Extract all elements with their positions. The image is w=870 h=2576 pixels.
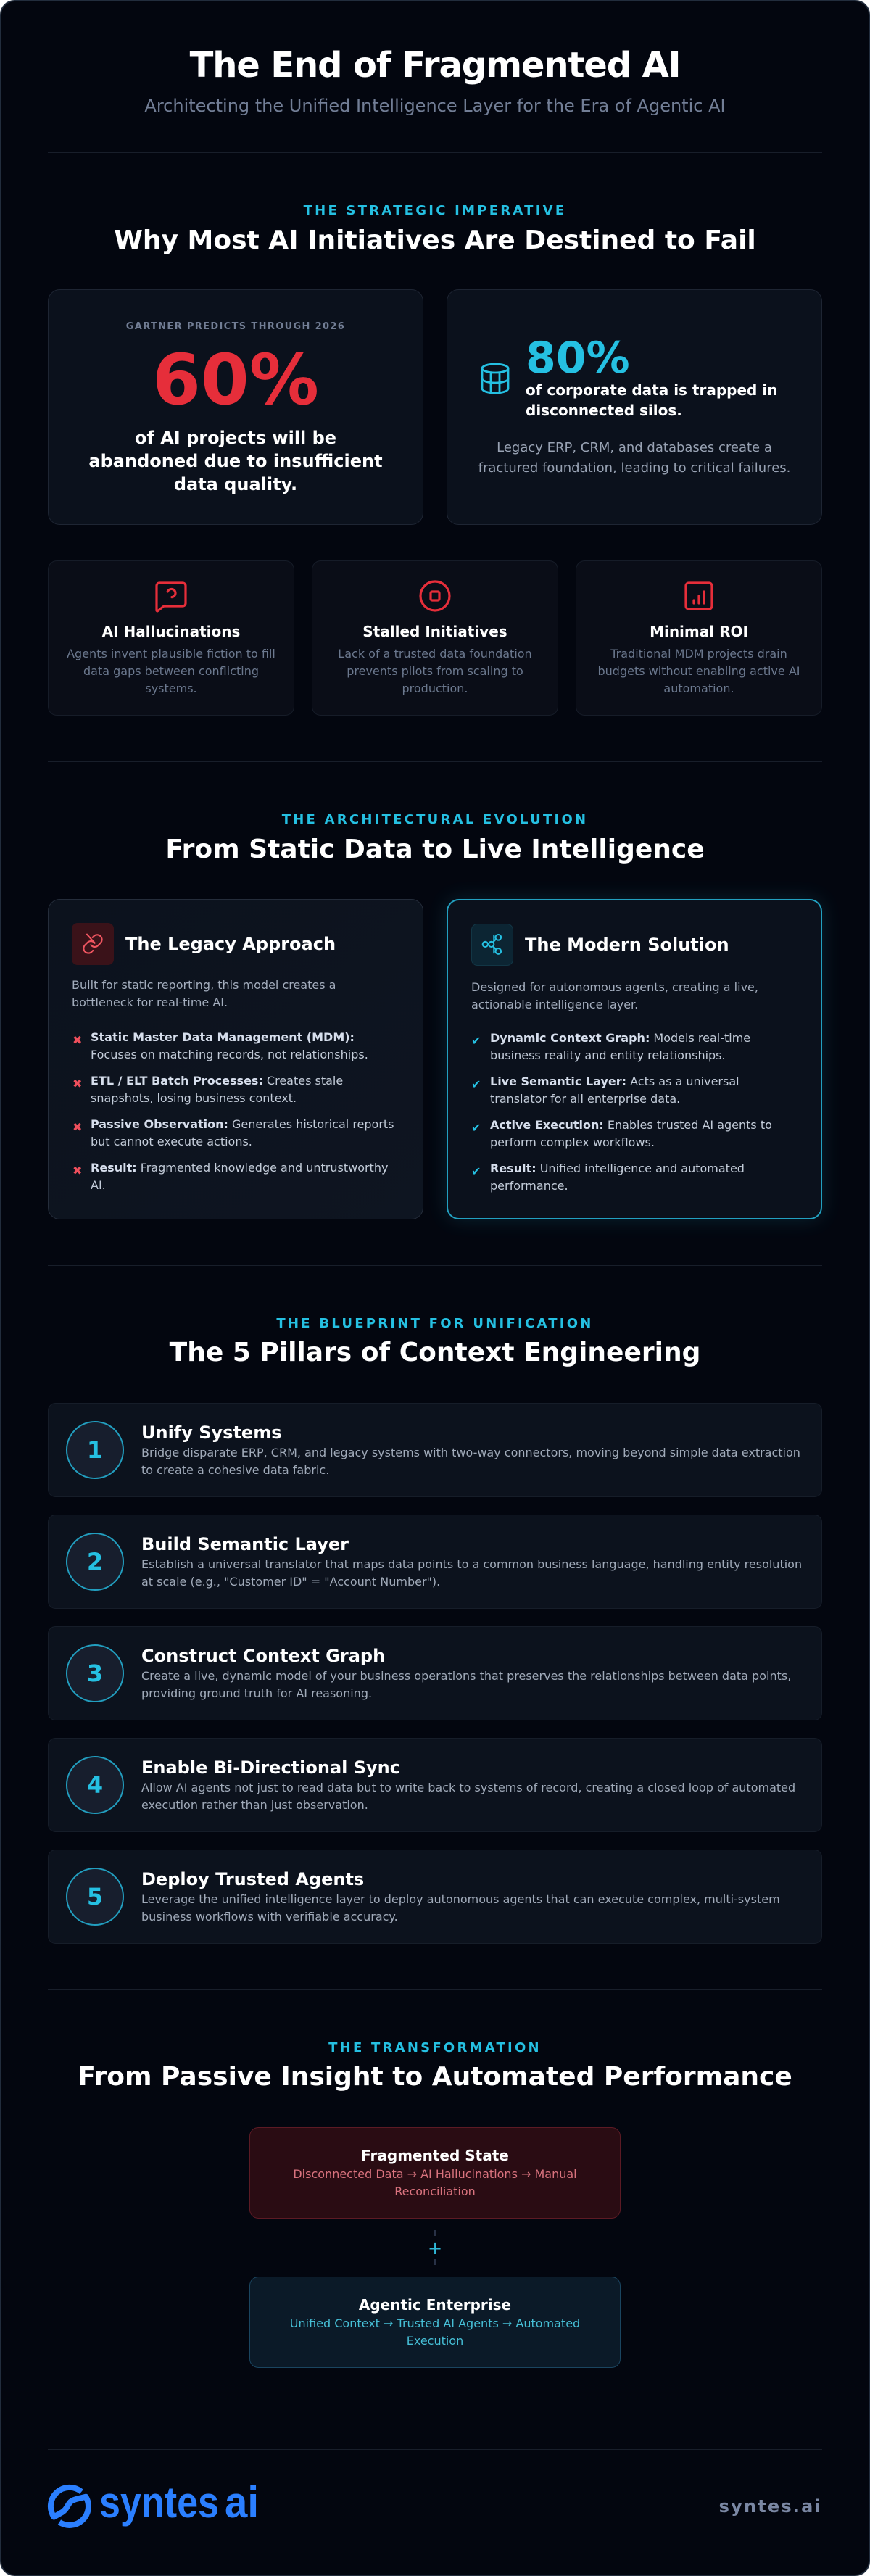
section heading: architectural evolution: From Static Data to Live Intelligence — [165, 834, 705, 864]
section heading: strategic imperative: THE STRATEGIC IMPERATIVE — [304, 203, 566, 218]
subtitle: Architecting the Unified Intelligence Layer for the Era of Agentic AI — [144, 96, 726, 116]
pillar 4: 4 — [87, 1771, 103, 1799]
pillar 5: 5 — [87, 1883, 103, 1910]
panel: fragmented state: Reconciliation — [394, 2184, 476, 2198]
panel: modern solution: actionable intelligence layer. — [471, 998, 638, 1011]
modern list: performance. — [490, 1179, 568, 1193]
stat description: data quality. — [174, 474, 297, 494]
legacy list: ✖ — [72, 1077, 82, 1090]
icon: bar chart square — [686, 583, 712, 609]
legacy list: Focuses on matching records, not relationships. — [91, 1048, 368, 1061]
panel: stalled initiatives: production. — [402, 682, 468, 695]
panel: legacy approach — [48, 899, 423, 1219]
description: Legacy ERP, CRM, and databases create a — [497, 440, 772, 455]
panel: AI hallucinations: Agents invent plausible fiction to fill — [67, 647, 276, 660]
panel: 60% stat — [48, 290, 423, 525]
icon: database — [482, 364, 508, 393]
title: The End of Fragmented AI — [190, 45, 680, 86]
section heading: blueprint: THE BLUEPRINT FOR UNIFICATION — [276, 1316, 594, 1331]
modern list: Acts as a universal — [626, 1074, 740, 1088]
pillar 5: Deploy Trusted Agents — [141, 1869, 364, 1889]
pillar 1: 1 — [87, 1436, 103, 1464]
icon: stop circle — [420, 581, 450, 610]
footer logo — [51, 2478, 259, 2527]
modern list: Models real-time — [650, 1031, 750, 1045]
panel: modern solution: The Modern Solution — [525, 935, 729, 955]
section heading: strategic imperative — [114, 203, 756, 255]
legacy list: Static Master Data Management (MDM): — [91, 1030, 355, 1044]
panel: 80% stat — [447, 290, 822, 525]
panel: minimal ROI — [576, 561, 822, 715]
modern list: ✔ — [471, 1034, 481, 1048]
panel: AI hallucinations: AI Hallucinations — [102, 623, 240, 640]
pillar 5: business workflows with verifiable accuracy. — [141, 1910, 398, 1923]
panel: agentic enterprise: Unified Context → Trusted AI Agents → Automated — [290, 2316, 580, 2330]
panel: legacy approach: The Legacy Approach — [125, 934, 336, 954]
panel: minimal ROI: budgets without enabling active AI — [598, 664, 800, 678]
stat label: disconnected silos. — [526, 402, 682, 419]
panel: AI hallucinations: data gaps between conflicting — [83, 664, 259, 678]
section heading: transformation: From Passive Insight to Automated Performance — [78, 2062, 792, 2092]
stat description: abandoned due to insufficient — [88, 451, 383, 471]
icon: broken link — [72, 923, 114, 965]
modern list: Active Execution: — [490, 1118, 604, 1132]
modern list: Live Semantic Layer: — [490, 1074, 626, 1088]
modern list: perform complex workflows. — [490, 1135, 655, 1149]
legacy list: ✖ — [72, 1120, 82, 1134]
pillar 4: Allow AI agents not just to read data but to write back to systems of record, creating a closed loop of automated — [141, 1781, 795, 1794]
panel: modern solution: Designed for autonomous agents, creating a live, — [471, 980, 758, 994]
panel: fragmented state: Disconnected Data → AI Hallucinations → Manual — [293, 2167, 577, 2181]
icon: logo mark — [51, 2488, 88, 2525]
stat label: of corporate data is trapped in — [526, 381, 777, 399]
icon: graph nodes — [471, 924, 513, 966]
modern list: Unified intelligence and automated — [536, 1161, 745, 1175]
modern list: Enables trusted AI agents to — [604, 1118, 772, 1132]
legacy list: but cannot execute actions. — [91, 1135, 252, 1148]
pillar 4: execution rather than just observation. — [141, 1798, 368, 1812]
pillar 4: Enable Bi-Directional Sync — [141, 1757, 400, 1778]
panel: modern solution — [447, 900, 821, 1219]
pillar 2: 2 — [87, 1548, 103, 1575]
legacy list: ✖ — [72, 1164, 82, 1177]
legacy list: Generates historical reports — [228, 1117, 394, 1131]
panel: minimal ROI: Minimal ROI — [650, 623, 748, 640]
source label: GARTNER PREDICTS THROUGH 2026 — [126, 321, 345, 332]
pillar 3: Construct Context Graph — [141, 1646, 385, 1666]
modern list: translator for all enterprise data. — [490, 1092, 680, 1106]
section heading: architectural evolution: THE ARCHITECTURAL EVOLUTION — [282, 812, 588, 827]
connector: plus — [428, 2230, 442, 2265]
pillar 1: to create a cohesive data fabric. — [141, 1463, 329, 1477]
panel: fragmented state: Fragmented State — [361, 2147, 509, 2164]
modern list: Result: — [490, 1161, 536, 1175]
modern list: ✔ — [471, 1077, 481, 1091]
legacy list: ✖ — [72, 1033, 82, 1047]
description: fractured foundation, leading to critical failures. — [478, 460, 790, 476]
legacy list: Fragmented knowledge and untrustworthy — [137, 1161, 388, 1175]
legacy list: Passive Observation: — [91, 1117, 228, 1131]
legacy list: ETL / ELT Batch Processes: — [91, 1074, 263, 1088]
pillar 2 — [48, 1515, 822, 1608]
pillar 4 — [48, 1739, 822, 1831]
legacy list: AI. — [91, 1178, 106, 1192]
section heading: architectural evolution — [165, 812, 705, 864]
panel: AI hallucinations — [48, 561, 294, 715]
panel: fragmented state — [249, 2127, 621, 2219]
footer url: syntes.ai — [719, 2496, 822, 2517]
section heading: transformation — [78, 2040, 792, 2092]
modern list — [471, 1031, 772, 1193]
modern list: ✔ — [471, 1164, 481, 1178]
panel: legacy approach: Built for static reporting, this model creates a — [72, 978, 336, 992]
panel: stalled initiatives — [312, 561, 558, 715]
modern list: ✔ — [471, 1121, 481, 1135]
pillar 3: 3 — [87, 1660, 103, 1687]
modern list: Dynamic Context Graph: — [490, 1031, 650, 1045]
pillar 1 — [48, 1404, 822, 1496]
pillar 2: Build Semantic Layer — [141, 1534, 349, 1554]
legacy list: Result: — [91, 1161, 137, 1175]
icon: speech bubble question — [157, 583, 186, 611]
panel: AI hallucinations: systems. — [145, 682, 197, 695]
pillar 5 — [48, 1850, 822, 1943]
legacy list: snapshots, losing business context. — [91, 1091, 297, 1105]
panel: agentic enterprise: Execution — [407, 2334, 463, 2348]
pillar 2: at scale (e.g., "Customer ID" = "Account Number"). — [141, 1575, 440, 1589]
pillar 3: providing ground truth for AI reasoning. — [141, 1686, 372, 1700]
section heading: blueprint — [170, 1316, 700, 1367]
legacy list — [72, 1030, 394, 1192]
section heading: blueprint: The 5 Pillars of Context Engineering — [170, 1338, 700, 1367]
connector: plus: + — [428, 2238, 442, 2258]
panel: agentic enterprise: Agentic Enterprise — [359, 2296, 511, 2314]
legacy list: Creates stale — [263, 1074, 343, 1088]
section heading: transformation: THE TRANSFORMATION — [328, 2040, 542, 2055]
logo wordmark: ai — [225, 2478, 259, 2527]
pillar 1: Bridge disparate ERP, CRM, and legacy systems with two-way connectors, moving beyond simple data extraction — [141, 1446, 800, 1459]
pillar 2: Establish a universal translator that maps data points to a common business language, handling entity resolution — [141, 1557, 802, 1571]
panel: stalled initiatives: Lack of a trusted data foundation — [338, 647, 532, 660]
panel: minimal ROI: automation. — [663, 682, 734, 695]
pillar 3 — [48, 1627, 822, 1720]
stat description: of AI projects will be — [135, 428, 336, 448]
panel: stalled initiatives: Stalled Initiatives — [362, 623, 508, 640]
stat number: 80% — [526, 333, 630, 384]
panel: stalled initiatives: prevents pilots from scaling to — [347, 664, 523, 678]
pillar 3: Create a live, dynamic model of your business operations that preserves the relationships between data points, — [141, 1669, 791, 1683]
panel: minimal ROI: Traditional MDM projects drain — [610, 647, 787, 660]
pillar 5: Leverage the unified intelligence layer to deploy autonomous agents that can execute complex, multi-system — [141, 1892, 780, 1906]
modern list: business reality and entity relationships. — [490, 1048, 726, 1062]
stat number: 60% — [152, 339, 319, 421]
panel: legacy approach: bottleneck for real-time AI. — [72, 995, 228, 1009]
logo wordmark: syntes — [99, 2478, 219, 2527]
section heading: strategic imperative: Why Most AI Initiatives Are Destined to Fail — [114, 225, 756, 255]
pillar 1: Unify Systems — [141, 1422, 281, 1443]
header — [144, 45, 726, 116]
panel: agentic enterprise — [249, 2277, 621, 2368]
